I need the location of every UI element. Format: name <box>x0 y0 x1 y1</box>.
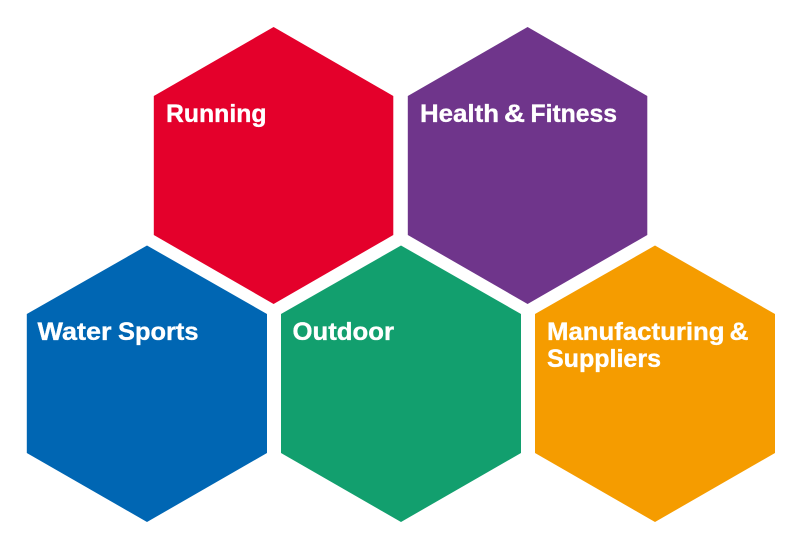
panel: Manufacturing & Suppliers <box>535 246 775 522</box>
panel: Health & Fitness: Health <box>420 100 499 128</box>
panel: Health & Fitness: Fitness <box>530 100 617 128</box>
panel: Health & Fitness: & <box>504 100 525 128</box>
panel: Water Sports: Sports <box>118 318 198 346</box>
panel: Outdoor: Outdoor <box>292 318 394 346</box>
panel: Running <box>154 27 393 304</box>
panel: Manufacturing & Suppliers: Manufacturing <box>547 318 724 346</box>
panel: Manufacturing & Suppliers: Suppliers <box>547 345 661 373</box>
panel: Water Sports <box>27 246 267 522</box>
panel: Outdoor <box>281 246 521 522</box>
panel: Manufacturing & Suppliers: & <box>730 318 748 346</box>
panel: Running: Running <box>166 100 266 128</box>
panel: Health & Fitness <box>408 27 647 304</box>
panel: Water Sports: Water <box>38 318 112 346</box>
